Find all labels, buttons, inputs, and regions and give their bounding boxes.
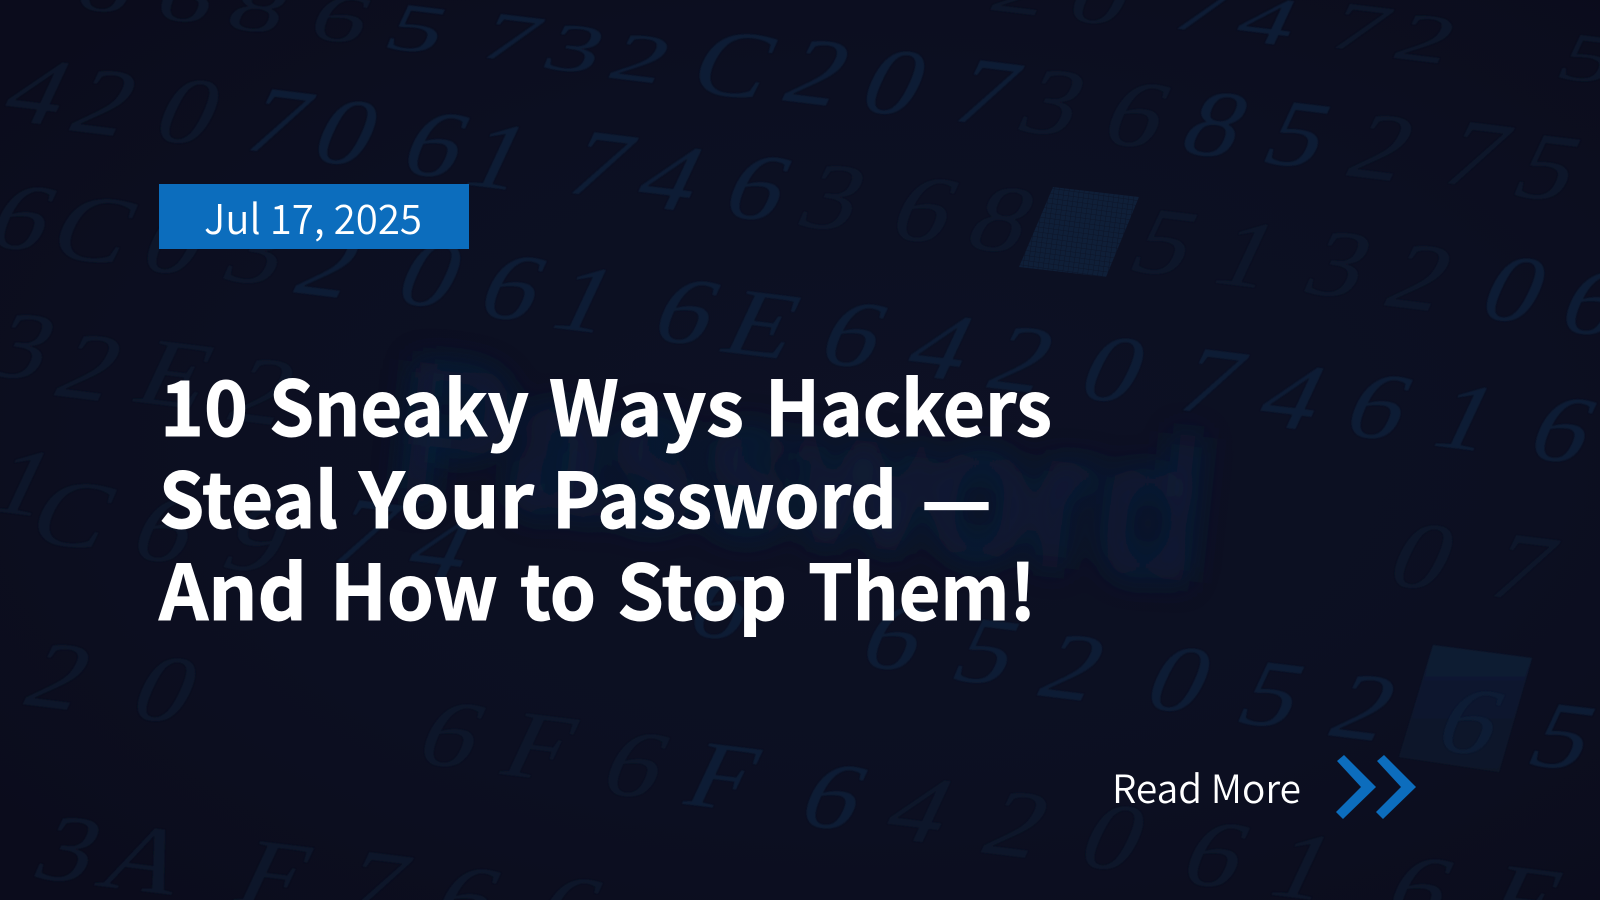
hex digits: 2 (279, 209, 381, 318)
pixel block upper (1019, 187, 1139, 277)
hex digits: 3 (783, 142, 885, 251)
title: to (520, 532, 596, 642)
hex digits: 2 (55, 47, 157, 156)
hex digits: 6 (1329, 351, 1431, 460)
hex digits: 2 (1023, 612, 1125, 721)
hex digits: 6 (1087, 59, 1189, 168)
hex digits: 3 (1003, 47, 1105, 156)
hex digits: 0 (1064, 782, 1166, 891)
hex digits: F (669, 721, 777, 831)
hex digits: 0 (116, 634, 218, 743)
hex digits: 2 (1332, 92, 1434, 201)
hex digits: 2 (9, 621, 111, 730)
title: Sneaky (269, 348, 529, 458)
hex digits: 2 (213, 336, 315, 445)
hex digits: 6 (672, 551, 774, 660)
date badge (159, 184, 469, 249)
hex digits: 4 (392, 491, 494, 600)
hex digits: 5 (1222, 639, 1324, 748)
hex digits: F (486, 691, 594, 801)
title: How (330, 532, 498, 642)
title: Your (358, 440, 535, 550)
hex digits: 6 (1421, 666, 1523, 775)
hex digits: E (120, 318, 234, 429)
hex digits: 4 (1243, 341, 1345, 450)
read more label: Read More (1112, 759, 1301, 815)
hex digits: 7 (467, 0, 555, 78)
title: Stop (617, 532, 787, 642)
hex digits: 7 (1426, 99, 1528, 208)
hex digits: 6 (804, 279, 906, 388)
hex digits: 6 (386, 89, 488, 198)
title: Hackers (765, 348, 1052, 458)
title: 10 (160, 348, 248, 458)
hex digits: C (15, 458, 135, 569)
title (158, 348, 1052, 642)
title: Password (552, 440, 897, 550)
hex digits: 5 (1115, 187, 1217, 296)
hex digits: 3 (208, 196, 310, 305)
hex digits: 2 (768, 17, 870, 126)
icon: double chevron arrow (1336, 755, 1416, 819)
hex digits: 0 (1373, 501, 1475, 610)
hex digits: 0 (139, 56, 241, 165)
hex digits: 7 (315, 477, 417, 586)
hex digits: 1 (1197, 199, 1299, 308)
hex digits: 0 (1465, 234, 1567, 343)
hex digits: 6 (116, 474, 218, 583)
hex digits: 1 (1416, 362, 1518, 471)
hex digits: 6 (637, 256, 739, 365)
hex digits: 2 (967, 769, 1069, 878)
hex digits: 7 (1161, 326, 1263, 435)
hex digits: 2 (1370, 222, 1472, 331)
title: And (158, 532, 307, 642)
hex digits: 5 (1248, 79, 1350, 188)
hex digits: E (707, 268, 821, 379)
hex digits: 6 (845, 582, 947, 691)
hex digits: 4 (870, 754, 972, 863)
hex digits: 0 (381, 219, 483, 328)
hex digits: 8 (1166, 69, 1268, 178)
hex digits: C (36, 173, 156, 284)
blurred word behind title: Password (386, 318, 1215, 625)
hex digits: 2 (972, 304, 1074, 413)
hex digits: 6 (402, 679, 504, 788)
hex digits: 6 (875, 154, 977, 263)
date badge: Jul 17, 2025 (204, 186, 422, 246)
hex digits: 9 (208, 484, 310, 593)
hex digits: 7 (936, 37, 1038, 146)
hex digits: 2 (1382, 0, 1470, 79)
hex digits: 6 (708, 132, 810, 241)
hex digits: 0 (1130, 624, 1232, 733)
hex digits: 2 (1314, 652, 1416, 761)
hex digits: 5 (1498, 112, 1600, 221)
hex digits: 4 (621, 122, 723, 231)
hex digits: 7 (1472, 512, 1574, 621)
pixel block lower (1399, 645, 1532, 772)
hex digits: 1 (535, 244, 637, 353)
hex digits: 6 (586, 709, 688, 818)
title: Steal (159, 440, 338, 550)
title: — (921, 440, 992, 550)
hex digits: 6 (784, 741, 886, 850)
hex digits: 0 (845, 27, 947, 136)
hex digits: 3 (1289, 209, 1391, 318)
hex digits: 3 (531, 9, 619, 89)
hex digits: 8 (952, 164, 1054, 273)
hex digits: 7 (550, 109, 652, 218)
hex digits: 5 (937, 596, 1039, 705)
hex digits: 6 (463, 232, 565, 341)
title: Them! (808, 532, 1036, 642)
hex digits: 0 (1064, 314, 1166, 423)
hex digits: 2 (597, 19, 685, 99)
hex digits: 1 (448, 101, 550, 210)
hex digits: C (676, 8, 796, 119)
hex digits: 2 (40, 312, 142, 421)
hex digits: 4 (891, 291, 993, 400)
hex digits: 0 (126, 186, 228, 295)
hex digits: 7 (228, 66, 330, 175)
hex digits: 0 (297, 77, 399, 186)
title: Ways (549, 348, 744, 458)
